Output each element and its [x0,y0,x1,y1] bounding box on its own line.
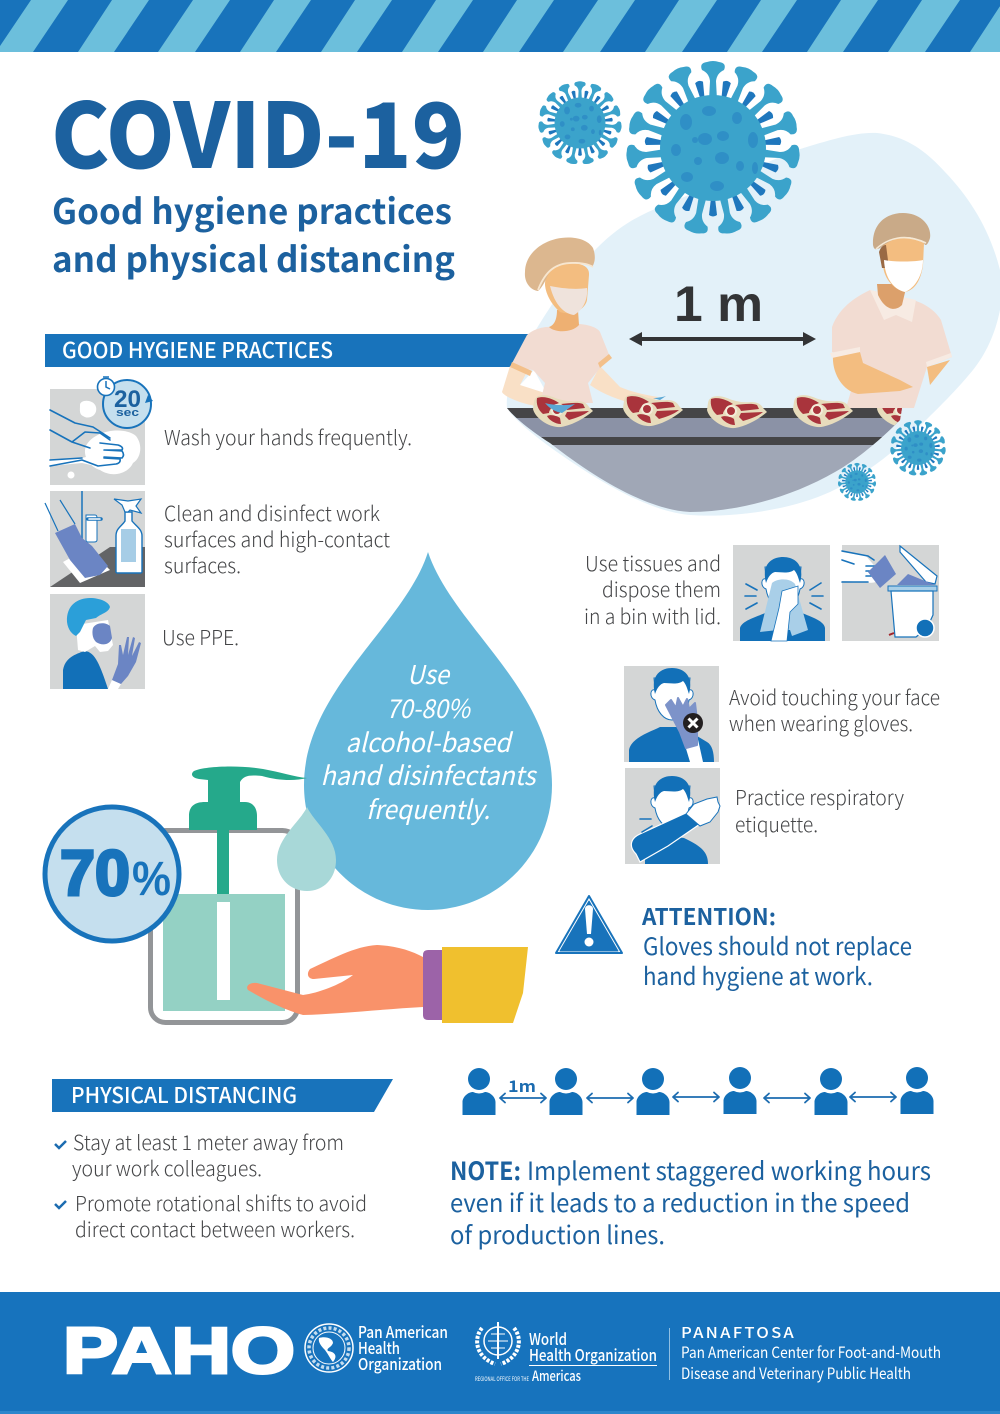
background blob [507,133,1000,516]
PAHO emblem [305,1324,353,1372]
PANAFTOSA name: PANAFTOSA [681,1322,796,1343]
attention text: ATTENTION: [641,898,776,932]
text: avoid touching face: Avoid touching your face [729,681,940,711]
text: use tissues: dispose them [602,573,721,603]
big disinfectant drop: hand disinfectants [320,756,538,793]
hand under dispenser [247,945,528,1023]
WHO name: Americas [532,1366,581,1386]
PAHO name: Pan American [358,1319,448,1343]
top striped band [0,0,1000,52]
bullet list: physical distancing: Promote rotational shifts to avoid [75,1187,367,1217]
text: clean surfaces [164,497,390,579]
icon: small virus [890,420,946,476]
note text [450,1152,931,1252]
conveyor belt [500,408,910,518]
steak pieces [533,394,937,428]
PANAFTOSA name: Disease and Veterinary Public Health [681,1362,911,1384]
title [51,64,465,283]
title: and physical distancing [52,232,455,283]
icon: respiratory etiquette [625,768,720,864]
small liquid drop [277,807,336,891]
icon: wash hands 20 sec: sec [116,407,139,419]
text: use tissues: Use tissues and [585,547,721,577]
banner: good hygiene practices: GOOD HYGIENE PRACTICES [62,334,333,365]
big disinfectant drop: alcohol-based [346,723,513,760]
WHO name: World [529,1326,567,1350]
illustration: workers at conveyor 1 m apart [500,133,1000,518]
title: COVID-19 [51,64,465,194]
big disinfectant drop [304,552,552,910]
note text: Implement staggered working hours [527,1152,931,1188]
big disinfectant drop: 70-80% [386,689,472,726]
text: respiratory etiquette: Practice respiratory [735,781,904,811]
PAHO wordmark: PAHO [63,1314,295,1387]
text: clean surfaces: Clean and disinfect work [164,497,380,527]
note text: NOTE: [450,1152,521,1188]
banner: good hygiene practices [45,334,535,367]
text: use tissues [584,547,721,630]
70% badge: % [132,853,171,906]
PAHO name: Organization [358,1351,442,1375]
bullet list: physical distancing: Stay at least 1 meter away from [73,1126,344,1156]
PAHO name: Health [358,1335,400,1359]
distance arrow [629,332,816,346]
text: use PPE: Use PPE. [162,621,239,651]
icon: wash hands 20 sec: 20 [114,386,141,413]
70% badge: 70 [60,837,130,909]
WHO name: REGIONAL OFFICE FOR THE [475,1374,529,1383]
text: respiratory etiquette [735,781,904,838]
WHO name [475,1326,657,1386]
70% badge [45,807,179,941]
sanitizer bottle [150,767,307,1022]
bullet list: physical distancing [55,1126,367,1243]
people spaced 1 m apart [462,1067,934,1115]
icon: wash hands 20 sec [50,377,153,485]
WHO name: Health Organization [529,1342,657,1366]
PANAFTOSA name: Pan American Center for Foot-and-Mouth [681,1341,941,1363]
PAHO name [358,1319,448,1375]
man worker [830,213,952,408]
attention text: Gloves should not replace [643,927,912,962]
text: clean surfaces: surfaces. [164,549,241,579]
text: respiratory etiquette: etiquette. [735,808,818,838]
icon: clean surfaces [45,491,145,587]
text: avoid touching face: when wearing gloves. [729,707,913,737]
big disinfectant drop: frequently. [366,790,490,827]
text: avoid touching face [729,681,940,737]
icon: dispose tissue in bin [842,545,939,641]
bullet list: physical distancing: direct contact between workers. [75,1213,355,1243]
note text: of production lines. [450,1216,665,1252]
text: use tissues: in a bin with lid. [584,600,721,630]
icon: PPE [50,594,145,689]
people spaced 1 m apart: 1m [508,1073,536,1097]
note text: even if it leads to a reduction in the speed [450,1184,910,1220]
icon: medium virus top [538,81,622,165]
banner: physical distancing: PHYSICAL DISTANCING [71,1079,297,1110]
icon: tiny virus [838,463,876,501]
text: wash hands: Wash your hands frequently. [164,421,412,451]
bullet list: physical distancing: your work colleagues. [72,1152,262,1182]
big disinfectant drop: Use [407,655,451,692]
banner: physical distancing [52,1079,393,1112]
gloved hands on the steak [545,396,666,413]
distance label: 1 m [674,276,763,332]
icon: large virus [625,61,801,236]
icon: avoid touching face [624,666,719,762]
WHO emblem [477,1322,519,1364]
text: clean surfaces: surfaces and high-contact [164,523,390,553]
woman worker [502,238,658,408]
attention text [641,898,912,992]
attention triangle icon [556,896,622,953]
PANAFTOSA name [681,1322,941,1384]
icon: tissue over face [733,545,830,641]
title: Good hygiene practices [52,184,452,235]
footer [0,1292,1000,1414]
attention text: hand hygiene at work. [643,957,873,992]
